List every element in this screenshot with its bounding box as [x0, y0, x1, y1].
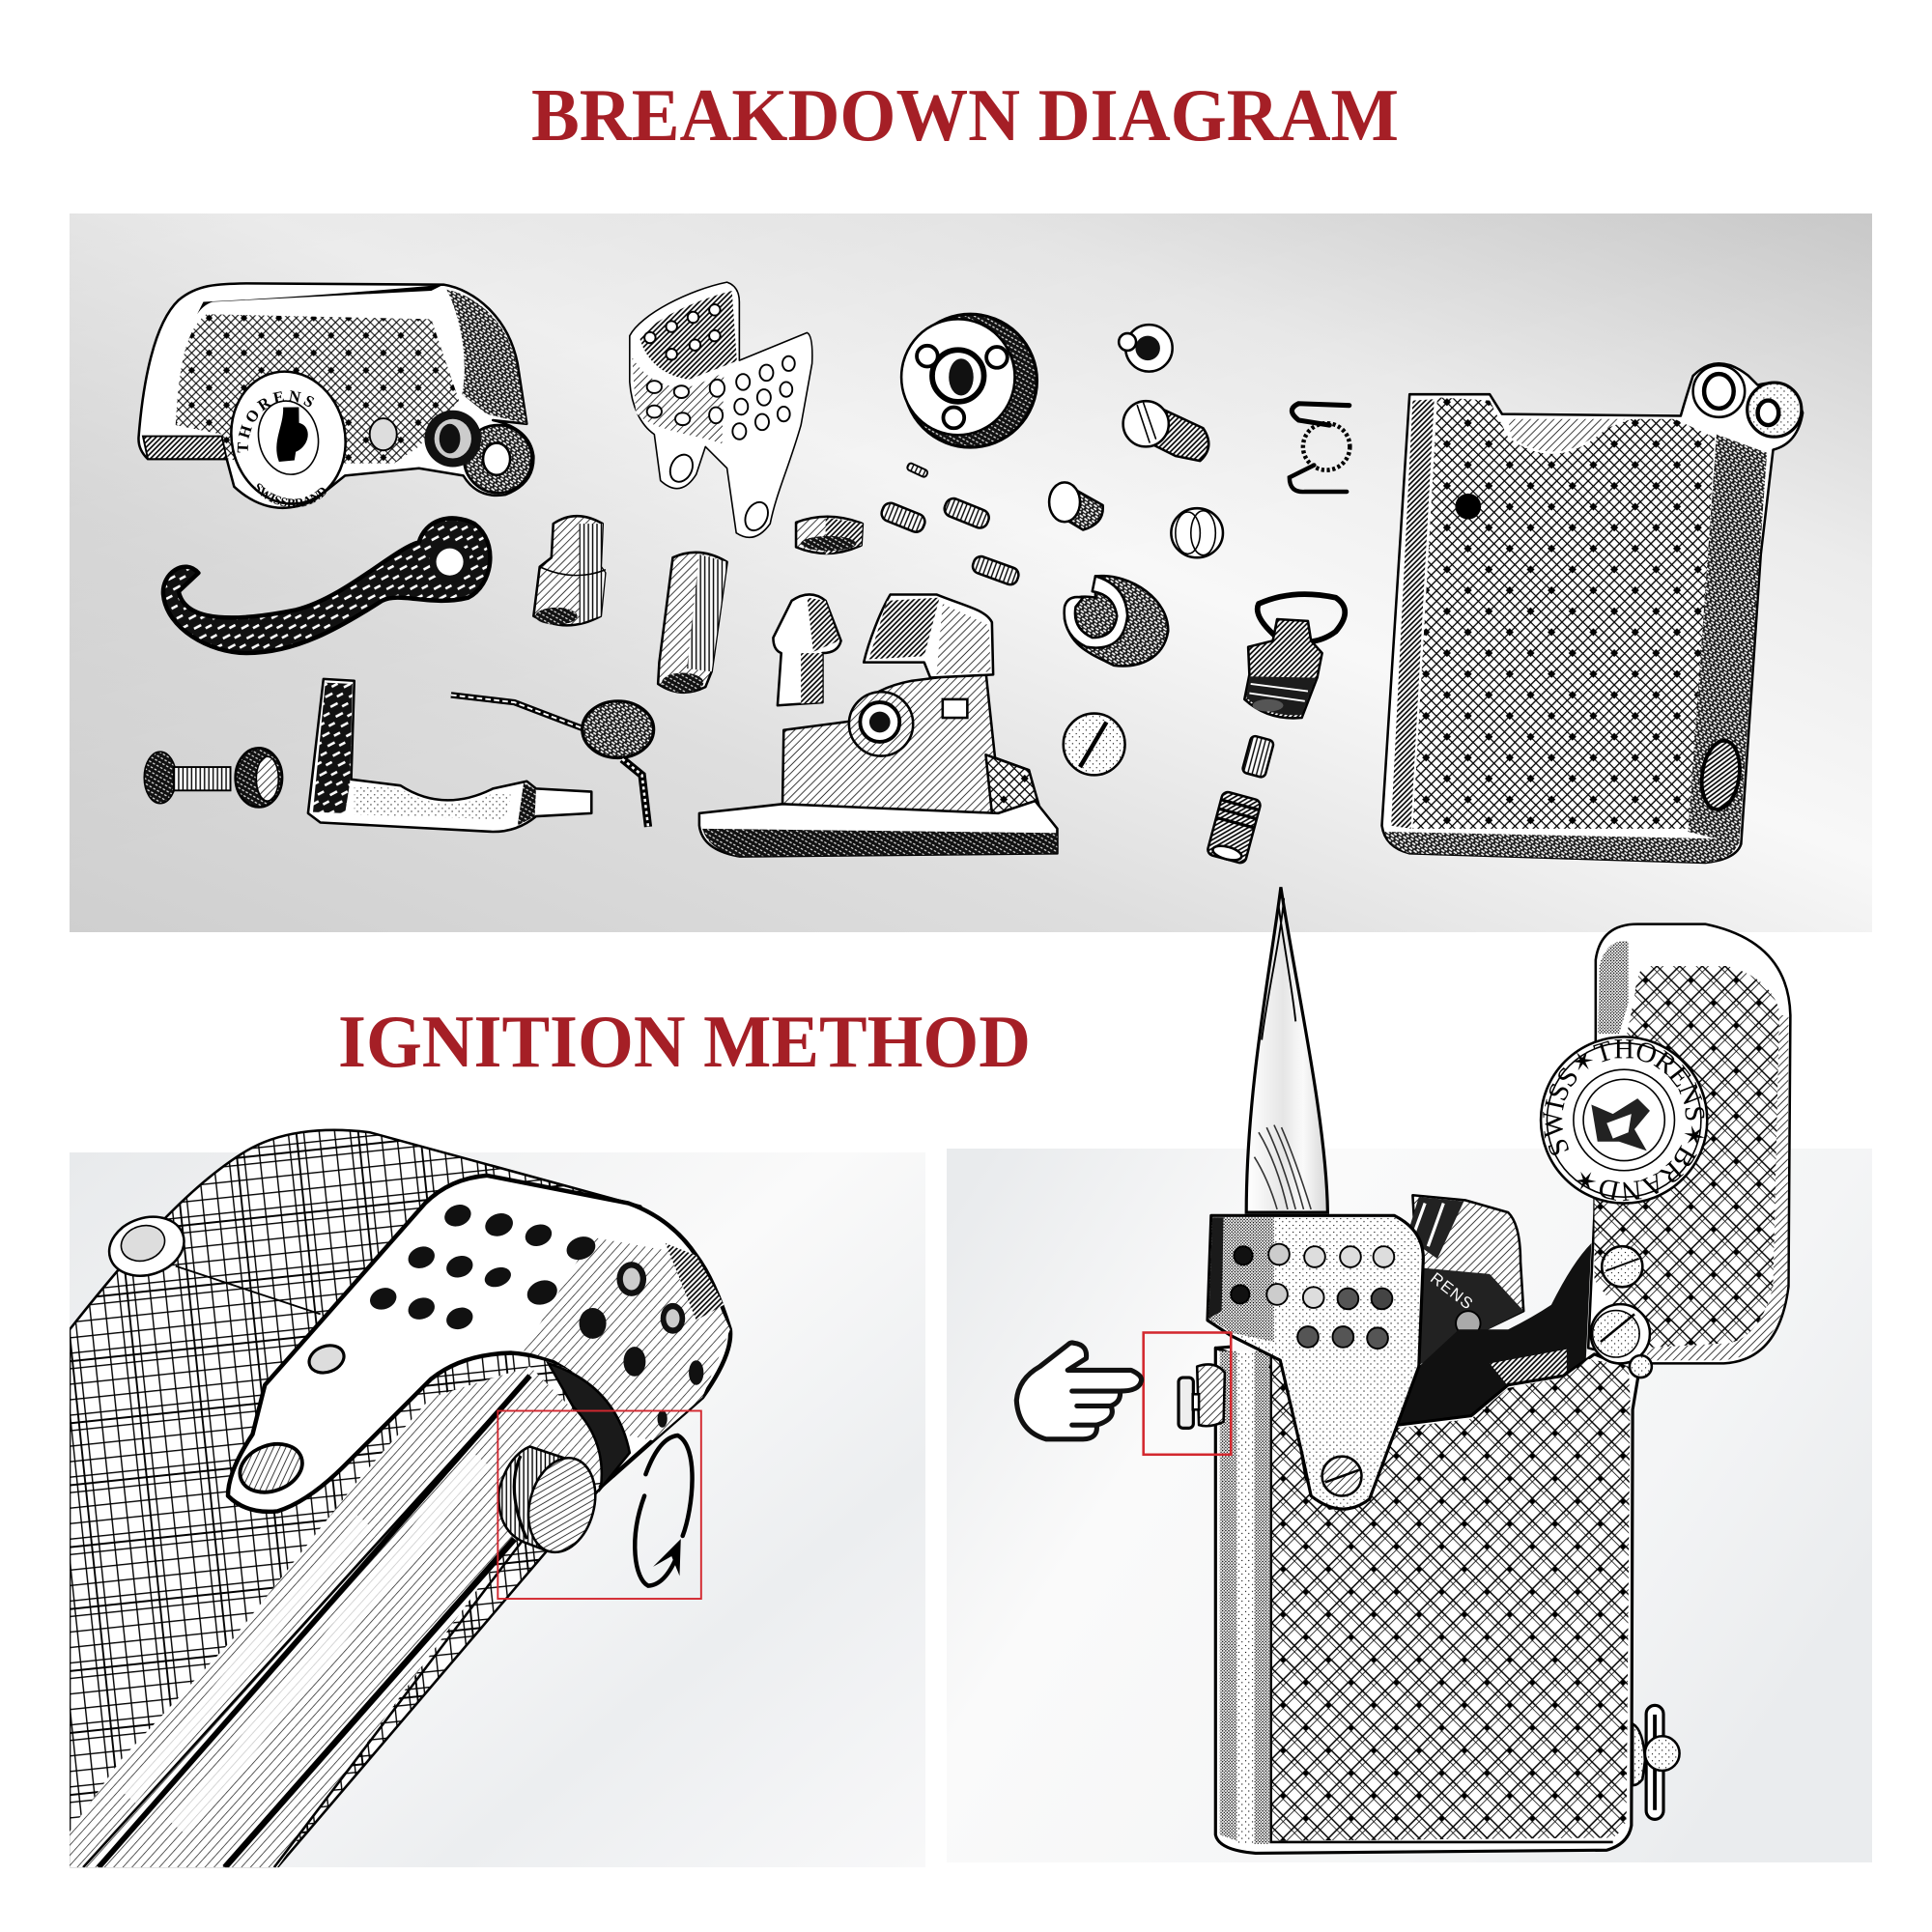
part: short cylinder [1049, 482, 1103, 530]
part: wire clip spring [1290, 404, 1350, 492]
lighter case with cross-hatched grid [70, 1130, 678, 1867]
perforated flash guard [1208, 1215, 1423, 1509]
part: knurled lid cap: SWISSBRAND [254, 483, 327, 508]
illustration: ignition wheel close-up [70, 1130, 730, 1867]
part: knurled lid cap [137, 282, 535, 510]
part: small spacer [1241, 735, 1274, 778]
part: nozzle pin [773, 594, 841, 705]
part: torsion spring [451, 695, 654, 827]
knurled thumbwheel [498, 1445, 597, 1553]
part: round nut [236, 748, 282, 808]
perforated guard plate [228, 1176, 730, 1512]
dark bearing arc [549, 1363, 630, 1489]
lid screws [1602, 1246, 1642, 1287]
mechanism block [1406, 1195, 1523, 1367]
part: split ring [1171, 508, 1223, 557]
part: perforated flash guard [630, 282, 812, 537]
exploded parts, right side [1049, 325, 1803, 864]
title: breakdown diagram: BREAKDOWN DIAGRAM [531, 73, 1399, 156]
chrome side rail [70, 1367, 622, 1867]
rivet [108, 1215, 185, 1277]
part: knurled wheel [901, 314, 1037, 447]
part: long sleeve [658, 553, 727, 693]
part: small rivet [1119, 325, 1173, 372]
part: stepped bushing [533, 516, 605, 625]
flame [1246, 887, 1327, 1212]
part: knurled lid cap: THORENS [238, 390, 315, 452]
part: slotted screw with shank [1123, 401, 1208, 461]
mechanism block: RENS [1427, 1268, 1477, 1314]
part: threaded screw [144, 752, 231, 804]
ignition wheel on the side [1179, 1347, 1231, 1428]
open lid [1588, 924, 1790, 1363]
black cam arm [1397, 1243, 1591, 1425]
panel: lighter in use background [947, 1149, 1872, 1862]
part: C-shaped collar [1065, 576, 1168, 666]
part: slotted screw head [1064, 714, 1125, 775]
panel: breakdown diagram background [70, 213, 1872, 932]
hinge screw and rivet [1591, 1304, 1652, 1378]
panel: ignition close-up background [70, 1152, 925, 1867]
red highlight box [497, 1410, 701, 1599]
part: knurled lighter case [1382, 363, 1803, 863]
part: small coil pins [879, 463, 1021, 586]
exploded parts, left and centre [137, 281, 1059, 858]
heading: ignition method: IGNITION METHOD [338, 1000, 1031, 1083]
right side swivel pin [1633, 1705, 1680, 1819]
part: L-shaped bracket [308, 679, 591, 832]
part: ribbed cylinder [1207, 791, 1262, 864]
icon: pointing hand [1016, 1343, 1142, 1439]
part: short ring [796, 517, 863, 554]
brand medallion: SWISS✶THORENS✶BRAND✶ [1543, 1039, 1704, 1202]
lighter body with cross-hatch [1215, 1348, 1638, 1853]
part: swivel bolt [1244, 594, 1345, 718]
part: striker arm [163, 518, 490, 653]
illustration: lighter being struck [1014, 887, 1792, 1855]
red highlight box [1144, 1332, 1231, 1455]
part: burner chimney assembly [699, 594, 1057, 857]
rotation arrow [635, 1435, 693, 1586]
decorative line from rivet [176, 1266, 321, 1314]
